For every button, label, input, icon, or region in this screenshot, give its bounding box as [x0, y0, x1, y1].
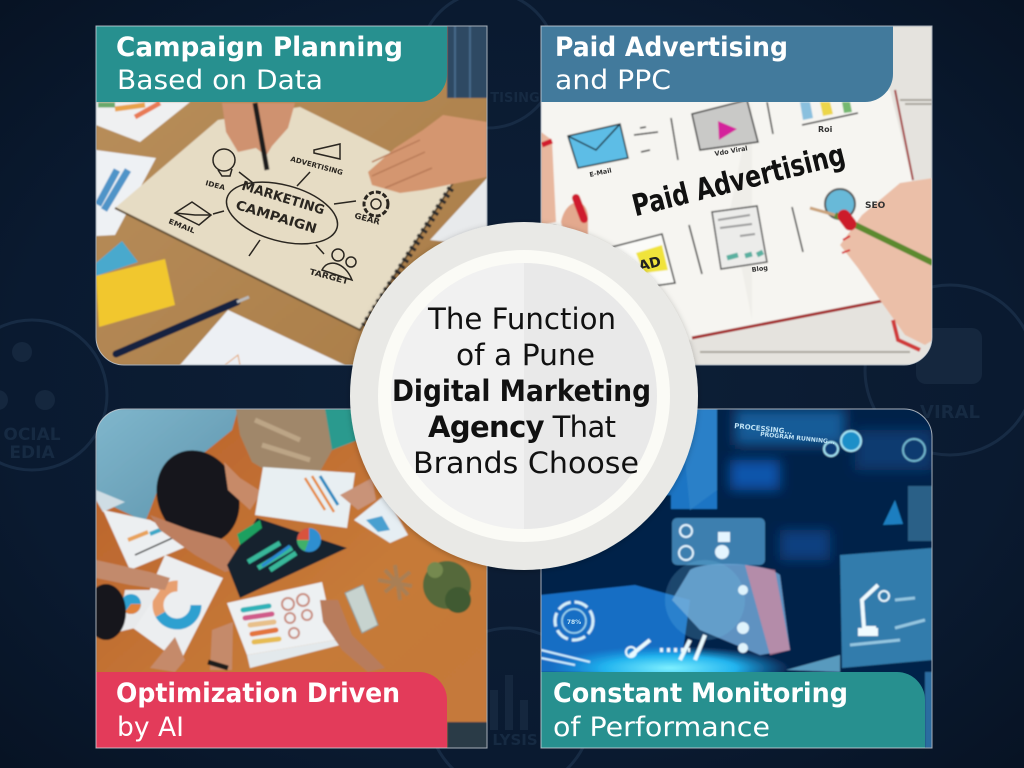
- label: optimization driven: by AI: [117, 712, 184, 743]
- panel: monitoring photo: [541, 409, 932, 748]
- gears: [841, 431, 861, 451]
- upper right widgets: [908, 486, 932, 541]
- panel: paid advertising photo: Paid Advertising: [629, 137, 849, 224]
- label: campaign planning: Campaign Planning: [116, 32, 403, 63]
- sketch: target circle: [825, 189, 855, 219]
- dark navy background with faint icons: VIRAL: [920, 402, 980, 423]
- panel: campaign planning photo: [96, 26, 487, 365]
- hand: [672, 564, 790, 655]
- arm to tablet: [150, 515, 236, 572]
- label: paid advertising: [541, 26, 893, 102]
- panel: paid advertising photo: SEO: [865, 201, 886, 211]
- panel: campaign planning photo: TARGET: [308, 267, 350, 286]
- panel: monitoring photo: 78%: [567, 619, 581, 626]
- dark navy background with faint icons: TISING: [490, 91, 540, 106]
- centre title: Agency That: [428, 410, 616, 444]
- label: constant monitoring: [541, 672, 925, 748]
- phone: [345, 585, 378, 633]
- sketch: blog page: [712, 206, 767, 269]
- label: campaign planning: [96, 26, 447, 102]
- centre dashboard: [672, 518, 765, 565]
- panel: monitoring photo: PROCESSING...: [734, 422, 793, 436]
- panel: paid advertising photo: Blog: [751, 264, 769, 274]
- label: optimization driven: Optimization Driven: [116, 678, 400, 709]
- dark navy background with faint icons: OCIAL: [3, 425, 61, 445]
- sketch: video: [692, 100, 758, 150]
- panel: paid advertising photo: Vdo Viral: [714, 144, 748, 158]
- centre circle badge: [350, 222, 698, 570]
- label: constant monitoring: of Performance: [553, 712, 770, 743]
- plant and wooden decor: [423, 561, 471, 609]
- notebook sketch: marketing campaign diagram: [175, 144, 388, 280]
- centre title: of a Pune: [456, 338, 595, 372]
- panel outlines: [96, 26, 932, 748]
- sketch: ROI bars: [800, 102, 813, 120]
- panel: campaign planning photo: EMAIL: [167, 217, 197, 236]
- panel: paid advertising photo: E-Mail: [589, 166, 612, 179]
- top right chart paper: [255, 467, 355, 528]
- sketch: AD window: [612, 234, 675, 290]
- dark chart tablet: [227, 518, 347, 598]
- panel: monitoring photo: PROGRAM RUNNING...: [760, 431, 835, 446]
- panel: paid advertising photo: AD: [637, 254, 663, 275]
- label: constant monitoring: Constant Monitoring: [553, 678, 848, 709]
- label: paid advertising: and PPC: [555, 65, 671, 96]
- sketch: email: [568, 124, 628, 168]
- panel: paid advertising photo: [541, 26, 933, 365]
- panel: campaign planning photo: ADVERTISING: [289, 155, 344, 177]
- bottom paper: [247, 640, 340, 668]
- panel: campaign planning photo: GEAR: [353, 211, 381, 227]
- left donut paper: [133, 555, 223, 662]
- paper with bars: [102, 510, 185, 570]
- panel: campaign planning photo: CAMPAIGN: [234, 198, 318, 237]
- centre title: Digital Marketing: [392, 374, 651, 408]
- label: optimization driven: [96, 672, 447, 748]
- dark navy background with faint icons: EDIA: [9, 443, 55, 463]
- panel: campaign planning photo: IDEA: [204, 179, 226, 192]
- panel: optimization photo: [86, 409, 487, 748]
- robot arm on table: [630, 635, 705, 660]
- centre title: [392, 302, 651, 480]
- centre title: The Function: [427, 302, 616, 336]
- panel: paid advertising photo: Roi: [818, 125, 833, 134]
- right dashboard with robot arm: [840, 548, 932, 668]
- gauge: [555, 602, 593, 640]
- panel: campaign planning photo: MARKETING: [240, 179, 326, 218]
- label: paid advertising: Paid Advertising: [555, 32, 788, 63]
- label: campaign planning: Based on Data: [117, 65, 323, 96]
- centre title: Brands Choose: [413, 446, 639, 480]
- dark navy background with faint icons: LYSIS: [492, 731, 538, 749]
